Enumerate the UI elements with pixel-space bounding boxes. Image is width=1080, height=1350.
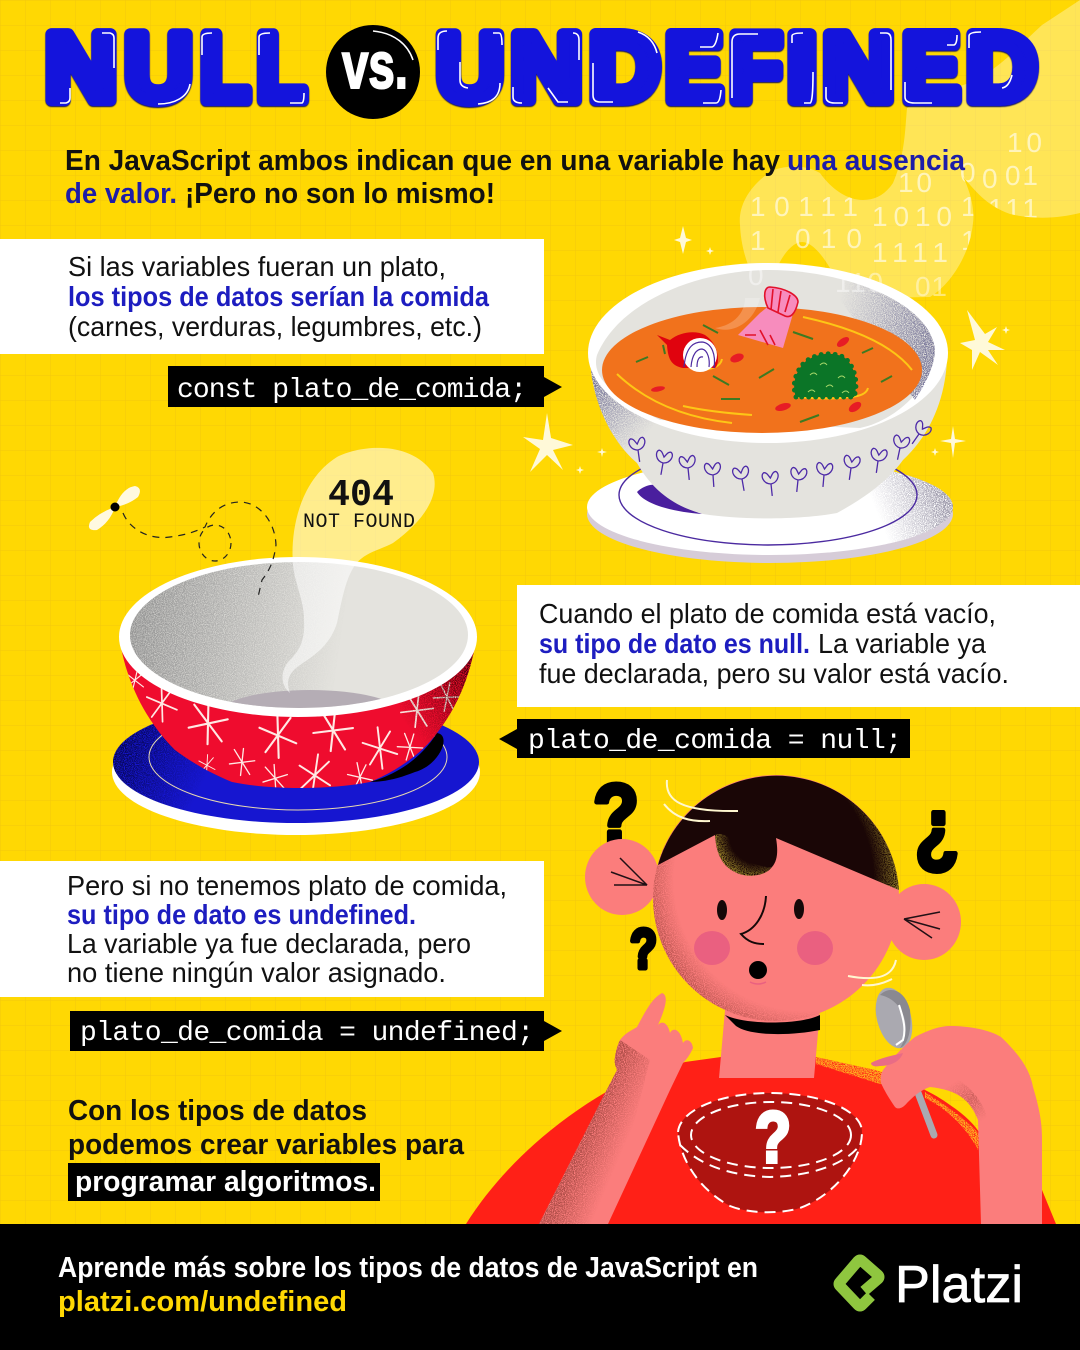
background steam with binary digits: 01 bbox=[1005, 160, 1038, 191]
background steam with binary digits: 1 bbox=[750, 225, 766, 256]
hair bbox=[658, 776, 899, 890]
shirt bowl bbox=[678, 1093, 862, 1212]
background steam with binary digits: 1 bbox=[961, 225, 977, 256]
title word: UNDEFINED: D bbox=[589, 14, 660, 121]
panel: null explanation text: su tipo de dato es null. bbox=[539, 628, 810, 659]
soup bbox=[602, 307, 922, 433]
title word: NULL bbox=[45, 14, 306, 121]
background steam with binary digits: 1 bbox=[961, 191, 977, 222]
footer text: platzi.com/undefined bbox=[58, 1286, 347, 1318]
closing text: Con los tipos de datos bbox=[68, 1095, 367, 1127]
spoon bbox=[870, 984, 934, 1135]
digits over bowl bbox=[748, 260, 947, 302]
code: undefined assignment: plato_de_comida = undefined; bbox=[80, 1018, 534, 1049]
404 text: 404 bbox=[328, 474, 394, 517]
icon: fly with dashed trail bbox=[89, 486, 276, 597]
panel: undefined explanation text bbox=[0, 861, 544, 997]
green herbs bbox=[636, 325, 892, 422]
panel: null explanation text bbox=[517, 585, 1080, 707]
intro text: de valor. bbox=[65, 178, 177, 210]
closing text: programar algoritmos. bbox=[75, 1166, 376, 1198]
vs badge bbox=[326, 25, 420, 119]
question marks: ? bbox=[630, 917, 657, 980]
intro text: una ausencia bbox=[787, 145, 966, 177]
title word: NULL: L bbox=[256, 14, 306, 121]
background steam with binary digits: 010 bbox=[795, 223, 862, 254]
motion lines bbox=[664, 780, 896, 985]
intro text bbox=[65, 145, 966, 210]
background steam with binary digits: 10 bbox=[898, 167, 932, 198]
grey interior bbox=[130, 562, 468, 708]
panel: undefined explanation text: Pero si no tenemos plato de comida, bbox=[67, 870, 507, 901]
white rim bbox=[119, 557, 477, 717]
footer text bbox=[58, 1252, 758, 1318]
closing text bbox=[68, 1095, 465, 1201]
title word: UNDEFINED: N bbox=[822, 14, 894, 121]
red peppers bbox=[651, 335, 863, 414]
choker bbox=[725, 1015, 820, 1034]
question marks: ? bbox=[593, 767, 639, 861]
footer bbox=[0, 1224, 1080, 1350]
title word: UNDEFINED: N bbox=[510, 14, 582, 121]
code: null assignment: plato_de_comida = null; bbox=[528, 726, 902, 757]
onion bbox=[657, 332, 718, 372]
not found text: NOT FOUND bbox=[303, 511, 415, 534]
Platzi logo bbox=[839, 1256, 1023, 1314]
illustration: empty red bowl bbox=[112, 555, 480, 835]
digits over bowl: 0 bbox=[748, 260, 764, 291]
panel: undefined explanation text: La variable ya fue declarada, pero bbox=[67, 928, 471, 959]
question marks: ¿ bbox=[915, 781, 959, 875]
panel: plate analogy text: (carnes, verduras, legumbres, etc.) bbox=[68, 311, 482, 342]
ears bbox=[585, 839, 961, 960]
intro text: ¡Pero no son lo mismo! bbox=[185, 178, 495, 210]
digits over bowl: 01 bbox=[915, 271, 947, 302]
panel: plate analogy text: los tipos de datos serían la comida bbox=[68, 281, 489, 312]
title word: NULL: N bbox=[45, 14, 117, 121]
right arm holding spoon bbox=[881, 1026, 1042, 1224]
left arm pointing bbox=[539, 993, 693, 1224]
soup ingredients bbox=[617, 287, 912, 423]
panel: plate analogy text bbox=[0, 239, 544, 354]
face features bbox=[694, 896, 833, 984]
digits over bowl: 110 bbox=[835, 267, 883, 298]
background steam with binary digits: 111 bbox=[988, 193, 1038, 224]
panel: plate analogy text: Si las variables fueran un plato, bbox=[68, 251, 446, 282]
illustration: confused character bbox=[466, 767, 1056, 1224]
panel: undefined explanation text: su tipo de dato es undefined. bbox=[67, 899, 416, 930]
title word: UNDEFINED: E bbox=[902, 14, 960, 121]
code: const declaration bbox=[168, 366, 562, 407]
background steam with binary digits: 0 bbox=[960, 157, 976, 188]
shirt bbox=[466, 1057, 981, 1224]
bowl body bbox=[590, 360, 947, 518]
background steam with binary digits bbox=[740, 0, 1080, 300]
title word: UNDEFINED: F bbox=[729, 14, 782, 121]
red bowl body bbox=[119, 635, 477, 788]
title word: UNDEFINED: D bbox=[966, 14, 1037, 121]
illustration: soup bowl bbox=[587, 260, 953, 563]
head bbox=[653, 775, 899, 1021]
panel: null explanation text: La variable ya bbox=[818, 628, 986, 659]
background steam with binary digits: 0 bbox=[982, 163, 998, 194]
background steam with binary digits: 1010 bbox=[872, 201, 952, 232]
panel: undefined explanation text: no tiene ningún valor asignado. bbox=[67, 957, 446, 988]
title word: UNDEFINED: E bbox=[665, 14, 723, 121]
background steam with binary digits: 10111 bbox=[750, 191, 858, 222]
question mark on shirt: ? bbox=[755, 1098, 791, 1178]
closing text: podemos crear variables para bbox=[68, 1129, 465, 1161]
panel: null explanation text: Cuando el plato de comida está vacío, bbox=[539, 598, 996, 629]
title word: UNDEFINED bbox=[436, 14, 1037, 121]
neck bbox=[719, 1010, 820, 1078]
bowl interior bbox=[596, 270, 935, 428]
shrimp bbox=[738, 287, 798, 348]
saucer bbox=[587, 445, 953, 563]
panel: null explanation text: fue declarada, pero su valor está vacío. bbox=[539, 658, 1009, 689]
title bbox=[45, 14, 1037, 121]
shirt shoulder shading bbox=[816, 1057, 980, 1150]
footer text: Aprende más sobre los tipos de datos de JavaScript en bbox=[58, 1252, 758, 1284]
flower pattern bbox=[628, 420, 932, 497]
intro text: En JavaScript ambos indican que en una variable hay bbox=[65, 145, 780, 177]
vs badge: vs. bbox=[342, 28, 408, 102]
bowl rim bbox=[588, 263, 948, 443]
code: const declaration: const plato_de_comida; bbox=[177, 375, 527, 406]
Platzi logo: Platzi bbox=[895, 1256, 1023, 1314]
title word: UNDEFINED: I bbox=[787, 14, 817, 121]
title word: NULL: L bbox=[200, 14, 250, 121]
steam over soup bbox=[715, 298, 760, 330]
snowflake pattern bbox=[128, 653, 474, 788]
question marks bbox=[593, 767, 959, 980]
sparkles bbox=[523, 226, 1010, 474]
yellow swirls bbox=[617, 317, 912, 423]
broccoli bbox=[794, 354, 856, 397]
steam with 404 message bbox=[282, 448, 435, 693]
blue saucer bbox=[112, 701, 480, 835]
title word: UNDEFINED: U bbox=[436, 14, 504, 121]
title word: NULL: U bbox=[124, 14, 192, 121]
background steam with binary digits: 10 bbox=[1007, 127, 1042, 158]
background steam with binary digits: 1111 bbox=[872, 237, 948, 268]
